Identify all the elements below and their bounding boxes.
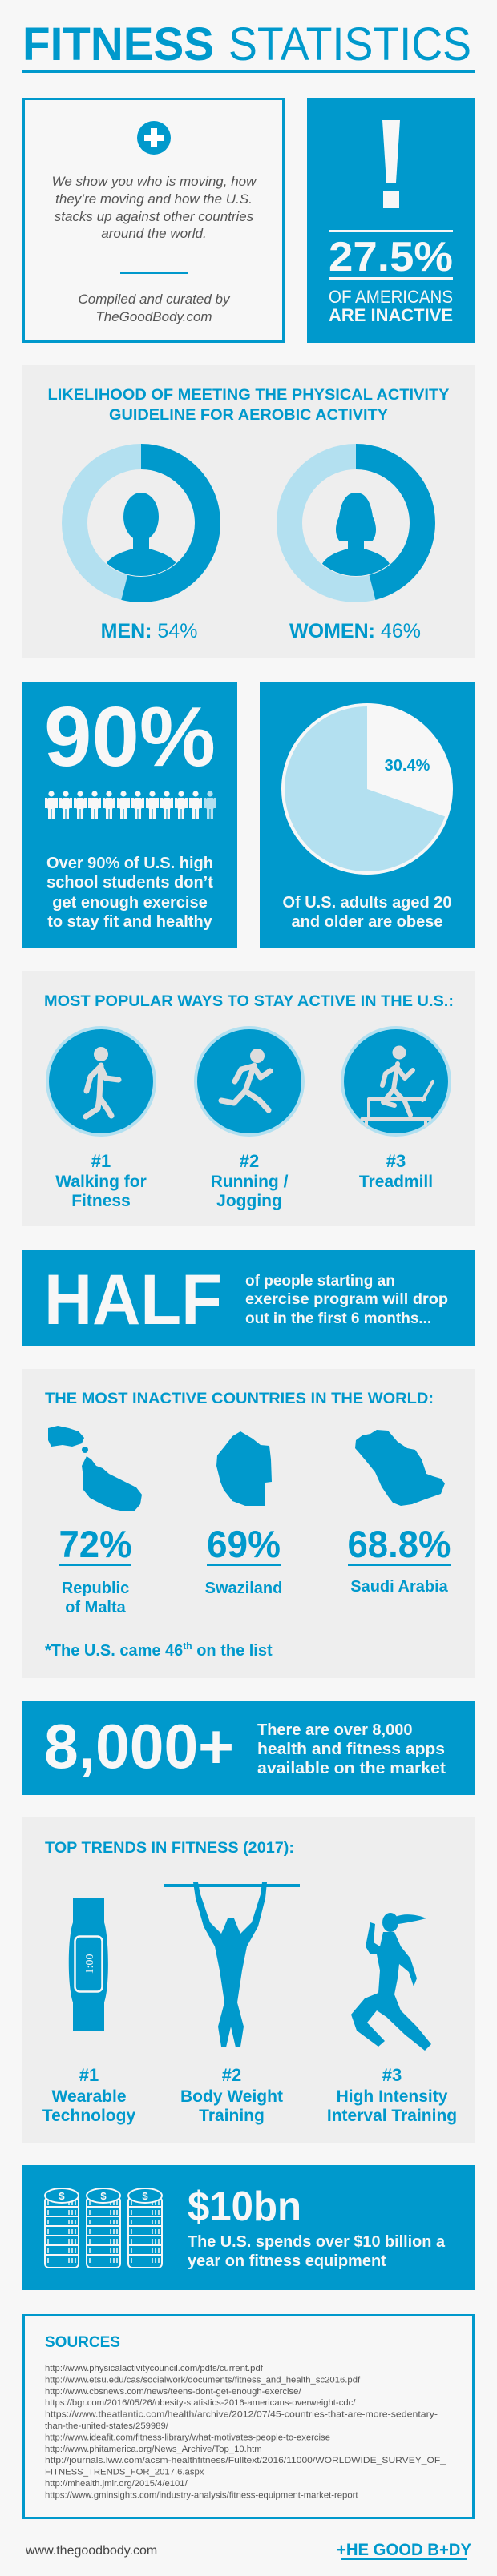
panel: sources: http://www.ideafit.com/fitness-library/what-motivates-people-to-exercise	[45, 2433, 330, 2442]
panel: 8000 apps: 8,000+	[44, 1711, 234, 1781]
panel: sources: http://www.physicalactivitycouncil.com/pdfs/current.pdf	[45, 2364, 264, 2373]
intro text: stacks up against other countries	[55, 209, 254, 224]
intro text: TheGoodBody.com	[95, 309, 212, 324]
panel: 90% students: school students don’t	[46, 874, 213, 892]
intro text: Compiled and curated by	[78, 292, 231, 307]
footer: logo: +HE GOOD B+DY	[337, 2541, 471, 2559]
pie chart: 30.4%	[385, 757, 430, 775]
footnote: th	[183, 1640, 192, 1652]
panel: intro	[24, 99, 284, 341]
label: men 54%: MEN: 54%	[101, 620, 197, 642]
panel: sources: http://www.cbsnews.com/news/teens-dont-get-enough-exercise/	[45, 2387, 301, 2397]
icon: running	[196, 1028, 303, 1135]
heading	[48, 387, 450, 424]
stats: countries	[59, 1523, 451, 1616]
heading: GUIDELINE FOR AEROBIC ACTIVITY	[109, 407, 388, 424]
title: FITNESS	[22, 18, 214, 70]
labels: trends: Technology	[42, 2107, 135, 2125]
panel: popular ways	[22, 971, 475, 1226]
map: swaziland	[216, 1431, 272, 1506]
donut: men	[75, 457, 208, 590]
labels: trends: High Intensity	[337, 2087, 448, 2106]
labels: trends: #1	[79, 2065, 99, 2085]
panel: sources: than-the-united-states/259989/	[45, 2421, 169, 2431]
labels: trends: Interval Training	[327, 2107, 457, 2125]
panel: 8000 apps: available on the market	[257, 1760, 446, 1777]
stats: countries: 72%	[59, 1523, 131, 1565]
icon: wearable band: 1:00	[84, 1954, 96, 1974]
labels: activities: #3	[386, 1151, 406, 1171]
panel: sources: SOURCES	[45, 2334, 120, 2351]
panel: popular ways: MOST POPULAR WAYS TO STAY ACTIVE IN THE U.S.:	[44, 993, 454, 1010]
panel: half drop out: of people starting an	[245, 1273, 395, 1290]
panel: 27.5% inactive	[307, 98, 475, 343]
intro text: around the world.	[101, 226, 207, 241]
panel: half drop out: exercise program will drop	[245, 1291, 448, 1308]
labels: activities: Jogging	[216, 1192, 282, 1210]
labels: activities: Walking for	[55, 1173, 147, 1191]
donut: women	[289, 457, 422, 590]
panel: 27.5% inactive: OF AMERICANS	[329, 287, 453, 307]
map: saudi arabia	[355, 1430, 445, 1506]
panel: trends: TOP TRENDS IN FITNESS (2017):	[45, 1840, 294, 1857]
panel: $10bn: The U.S. spends over $10 billion a	[188, 2233, 446, 2251]
labels: activities: Fitness	[71, 1192, 131, 1210]
panel: half drop out: HALF	[44, 1259, 222, 1339]
panel: obesity: and older are obese	[292, 913, 442, 931]
labels: trends: Body Weight	[180, 2087, 283, 2106]
panel: sources: https://bgr.com/2016/05/26/obesity-statistics-2016-americans-overweight-cdc/	[45, 2398, 356, 2408]
intro text: We show you who is moving, how	[52, 174, 257, 189]
panel: inactive countries: THE MOST INACTIVE COUNTRIES IN THE WORLD:	[45, 1391, 434, 1407]
labels: trends	[42, 2065, 457, 2125]
icon: exclamation	[382, 120, 400, 208]
panel: 90% students: get enough exercise	[52, 894, 208, 912]
panel: sources: FITNESS_TRENDS_FOR_2017.6.aspx	[45, 2468, 204, 2477]
labels: trends: #3	[382, 2065, 402, 2085]
label: women 46%: WOMEN: 46%	[289, 620, 421, 642]
panel: sources: http://mhealth.jmir.org/2015/4/e101/	[45, 2479, 188, 2489]
panel: sources: http://journals.lww.com/acsm-healthfitness/Fulltext/2016/11000/WORLDWIDE_SURVEY_OF_	[45, 2456, 446, 2465]
panel: $10bn: $10bn	[188, 2184, 301, 2230]
panel: half drop out: out in the first 6 months...	[245, 1310, 431, 1327]
panel: 27.5% inactive: ARE INACTIVE	[329, 305, 453, 325]
panel: obesity	[260, 682, 475, 948]
panel: sources	[24, 2315, 473, 2518]
stats: countries: 69%	[207, 1523, 281, 1565]
pie chart	[283, 705, 451, 873]
panel: sources: http://www.etsu.edu/cas/socialwork/documents/fitness_and_health_sc2016.pdf	[45, 2375, 361, 2385]
labels: activities: #2	[240, 1151, 259, 1171]
icon: coin stacks	[45, 2188, 162, 2268]
stats: countries: 68.8%	[348, 1523, 451, 1565]
labels: trends: Wearable	[51, 2087, 127, 2106]
labels: trends: #2	[222, 2065, 241, 2085]
heading: LIKELIHOOD OF MEETING THE PHYSICAL ACTIVITY	[48, 387, 450, 404]
panel: 27.5% inactive: 27.5%	[329, 234, 453, 280]
panel: trends	[22, 1817, 475, 2143]
title: STATISTICS	[228, 18, 471, 70]
labels: activities: Running /	[211, 1173, 289, 1191]
footer: url: www.thegoodbody.com	[25, 2544, 157, 2558]
icon: people row	[45, 791, 216, 819]
panel: $10bn	[22, 2165, 475, 2290]
icon: wearable band	[69, 1898, 108, 2031]
title	[22, 18, 475, 73]
panel: 90% students: Over 90% of U.S. high	[46, 855, 213, 872]
labels: activities: #1	[91, 1151, 111, 1171]
intro text: they’re moving and how the U.S.	[55, 191, 253, 207]
footnote: on the list	[192, 1642, 273, 1660]
stats: countries: of Malta	[65, 1599, 127, 1616]
panel: 8000 apps: There are over 8,000	[257, 1721, 412, 1739]
stats: countries: Swaziland	[205, 1580, 282, 1597]
panel: sources: https://www.gminsights.com/industry-analysis/fitness-equipment-market-report	[45, 2490, 358, 2500]
panel: 90% students: to stay fit and healthy	[47, 913, 213, 931]
stats: countries: Republic	[62, 1580, 129, 1597]
intro text	[52, 174, 257, 324]
panel: 90% students	[22, 682, 237, 948]
panel: sources: https://www.theatlantic.com/health/archive/2012/07/45-countries-that-are-more-sedentary-	[45, 2410, 438, 2420]
map: malta	[48, 1426, 142, 1511]
panel: 90% students: 90%	[44, 690, 216, 784]
panel: 8000 apps: health and fitness apps	[257, 1741, 445, 1758]
panel: inactive countries	[22, 1369, 475, 1678]
icon: walking	[47, 1028, 155, 1135]
labels: activities	[55, 1151, 433, 1210]
footnote: *The U.S. came 46	[45, 1642, 183, 1660]
labels: trends: Training	[199, 2107, 265, 2125]
icon: pull-up	[164, 1882, 300, 2047]
panel: obesity: Of U.S. adults aged 20	[282, 894, 452, 912]
panel: 8000 apps	[22, 1701, 475, 1795]
stats: countries: Saudi Arabia	[350, 1578, 449, 1596]
panel: likelihood	[22, 365, 475, 658]
icon: runner woman	[351, 1913, 431, 2051]
icon: plus	[137, 121, 171, 155]
panel: sources: http://www.phitamerica.org/News_Archive/Top_10.htm	[45, 2445, 262, 2454]
panel: $10bn: year on fitness equipment	[188, 2252, 386, 2270]
labels: activities: Treadmill	[359, 1173, 433, 1191]
icon: treadmill	[342, 1028, 450, 1135]
panel: half drop out	[22, 1250, 475, 1346]
